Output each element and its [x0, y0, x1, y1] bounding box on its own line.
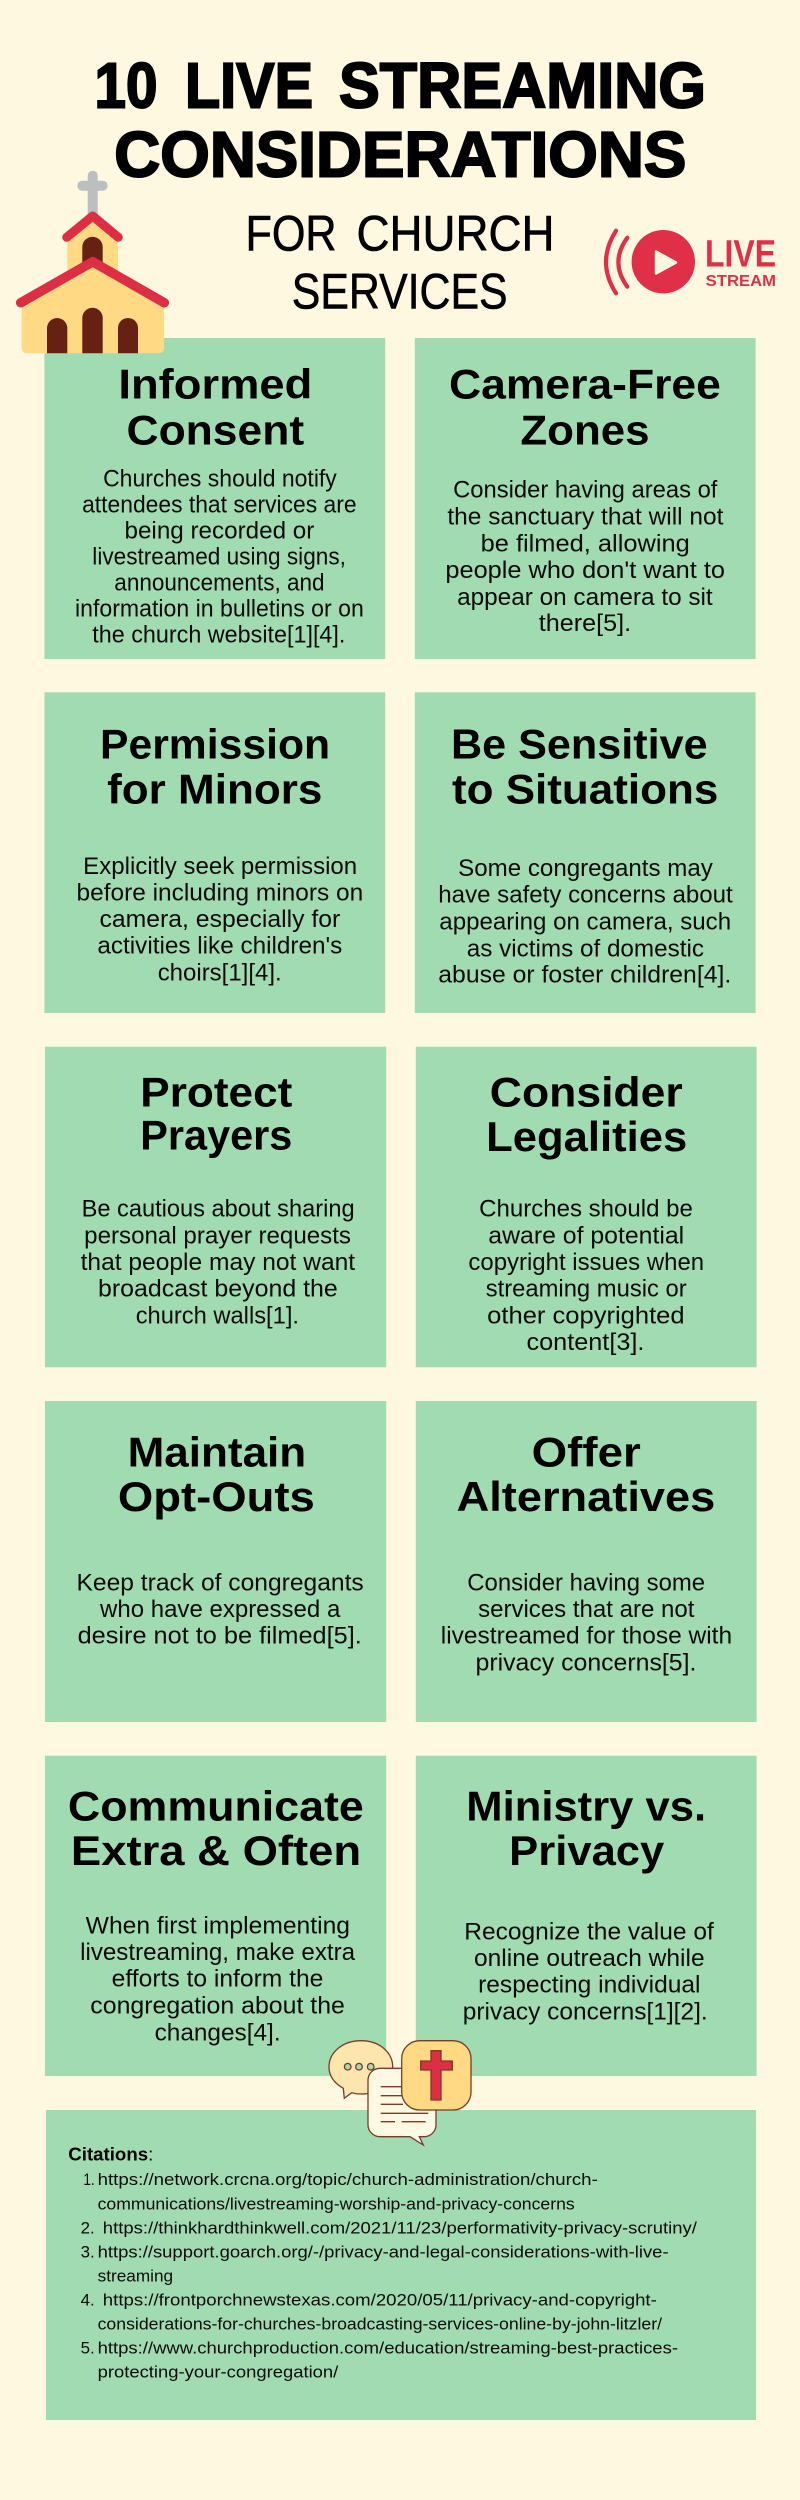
heading: informed consent: Informed: [118, 360, 312, 407]
heading: offer alternatives: [457, 1429, 715, 1520]
text: consider legalities body: content[3].: [526, 1329, 644, 1356]
heading: communicate extra and often: Communicate: [68, 1783, 364, 1830]
list: citation links: https://frontporchnewstexas.com/2020/05/11/privacy-and-copyright-: [103, 2290, 657, 2309]
heading: permission for minors: for Minors: [107, 765, 322, 812]
text: camera-free zones body: people who don't want to: [445, 557, 725, 584]
heading: consider legalities: Legalities: [486, 1113, 687, 1160]
text: informed consent body: the church website[1][4].: [92, 622, 345, 649]
text: informed consent body: [75, 466, 364, 649]
heading: be sensitive to situations: [451, 720, 718, 812]
text: ministry vs privacy body: respecting individual: [478, 1972, 700, 1999]
heading: offer alternatives: Alternatives: [457, 1473, 715, 1520]
text: maintain opt-outs body: desire not to be filmed[5].: [78, 1623, 362, 1650]
text: ministry vs privacy body: online outreach while: [474, 1945, 705, 1972]
heading: protect prayers: Protect: [140, 1069, 292, 1116]
text: camera-free zones body: appear on camera to sit: [457, 584, 713, 611]
heading: be sensitive to situations: to Situations: [452, 765, 718, 812]
text: informed consent body: being recorded or: [124, 518, 314, 545]
text: communicate body: efforts to inform the: [112, 1966, 323, 1993]
text: camera-free zones body: Consider having areas of: [453, 477, 718, 504]
text: camera-free zones body: the sanctuary that will not: [447, 504, 724, 531]
title: LIVE: [185, 49, 313, 121]
text: informed consent body: attendees that services are: [82, 492, 357, 519]
subtitle: CHURCH: [356, 206, 554, 262]
title: STREAMING: [339, 49, 706, 121]
list: citation links: https://thinkhardthinkwell.com/2021/11/23/performativity-privacy-scrutiny/: [103, 2218, 697, 2237]
list: citation links: 4.: [81, 2290, 95, 2309]
text: permission for minors body: choirs[1][4].: [158, 960, 282, 987]
text: permission for minors body: Explicitly seek permission: [83, 853, 357, 880]
text: offer alternatives body: privacy concerns[5].: [476, 1649, 696, 1676]
list: citation links: streaming: [98, 2266, 173, 2285]
text: protect prayers body: Be cautious about sharing: [82, 1196, 355, 1223]
text: communicate body: [80, 1912, 356, 2047]
panel: maintain opt-outs: [45, 1401, 386, 1722]
text: permission for minors body: before including minors on: [76, 880, 363, 907]
icon: speech bubbles with cross: [329, 2041, 471, 2145]
text: consider legalities body: streaming music or: [486, 1276, 687, 1303]
text: informed consent body: information in bulletins or on: [75, 596, 364, 623]
panel: camera-free zones: [415, 338, 756, 659]
heading: camera-free zones: [449, 360, 721, 453]
text: informed consent body: announcements, and: [114, 570, 324, 597]
heading: ministry vs privacy: [466, 1783, 706, 1874]
text: offer alternatives body: services that are not: [478, 1596, 695, 1623]
list: citation links: 3.: [81, 2242, 95, 2261]
text: maintain opt-outs body: Keep track of congregants: [76, 1569, 364, 1596]
text: be sensitive body: have safety concerns about: [438, 882, 733, 909]
list: citation links: protecting-your-congregation/: [98, 2362, 339, 2381]
heading: informed consent: Consent: [126, 406, 304, 453]
heading: consider legalities: [486, 1069, 687, 1160]
subtitle: SERVICES: [292, 263, 508, 319]
icon: live stream logo: STREAM: [706, 273, 776, 290]
text: camera-free zones body: [445, 477, 725, 637]
text: offer alternatives body: Consider having some: [467, 1569, 705, 1596]
text: informed consent body: Churches should notify: [103, 466, 337, 493]
heading: communicate extra and often: Extra & Often: [71, 1827, 361, 1874]
text: protect prayers body: that people may not want: [81, 1249, 355, 1276]
panel: consider legalities: [416, 1047, 757, 1367]
heading: ministry vs privacy: Privacy: [509, 1827, 665, 1874]
text: informed consent body: livestreamed using signs,: [92, 544, 346, 571]
heading: ministry vs privacy: Ministry vs.: [466, 1783, 706, 1830]
heading: camera-free zones: Camera-Free: [449, 360, 721, 407]
text: be sensitive body: [438, 855, 733, 989]
list: citation links: considerations-for-churches-broadcasting-services-online-by-john-litzler/: [98, 2314, 662, 2333]
heading: citations: Citations:: [68, 2145, 153, 2165]
text: be sensitive body: as victims of domestic: [467, 935, 704, 962]
heading: informed consent: [118, 360, 312, 453]
text: ministry vs privacy body: Recognize the value of: [464, 1918, 714, 1945]
subtitle: [246, 206, 554, 319]
text: permission for minors body: activities like children's: [97, 933, 342, 960]
text: offer alternatives body: livestreamed for those with: [441, 1623, 732, 1650]
heading: offer alternatives: Offer: [532, 1429, 641, 1476]
text: ministry vs privacy body: privacy concerns[1][2].: [463, 1998, 708, 2025]
text: offer alternatives body: [441, 1569, 732, 1676]
text: maintain opt-outs body: [76, 1569, 364, 1650]
text: camera-free zones body: be filmed, allowing: [481, 531, 690, 558]
list: citation links: 5.: [81, 2338, 95, 2357]
text: permission for minors body: camera, especially for: [100, 906, 340, 933]
list: citation links: communications/livestreaming-worship-and-privacy-concerns: [98, 2194, 575, 2213]
heading: protect prayers: Prayers: [140, 1111, 292, 1158]
panel: protect prayers: [45, 1047, 386, 1367]
text: protect prayers body: broadcast beyond the: [98, 1276, 338, 1303]
heading: protect prayers: [140, 1069, 292, 1158]
panel: permission for minors: [44, 692, 385, 1013]
icon: live stream logo: [606, 230, 776, 293]
heading: be sensitive to situations: Be Sensitive: [451, 720, 708, 767]
list: citation links: https://www.churchproduction.com/education/streaming-best-practices-: [98, 2338, 678, 2357]
text: protect prayers body: personal prayer requests: [84, 1222, 351, 1249]
heading: maintain opt-outs: [118, 1429, 315, 1520]
text: camera-free zones body: there[5].: [539, 610, 631, 637]
heading: consider legalities: Consider: [490, 1069, 683, 1116]
panel: communicate extra and often: [45, 1756, 386, 2076]
text: consider legalities body: [468, 1195, 704, 1356]
text: protect prayers body: [81, 1196, 355, 1329]
text: consider legalities body: copyright issues when: [468, 1249, 704, 1276]
text: consider legalities body: Churches should be: [479, 1195, 693, 1222]
heading: communicate extra and often: [68, 1783, 364, 1874]
heading: camera-free zones: Zones: [520, 406, 650, 453]
text: protect prayers body: church walls[1].: [136, 1302, 299, 1329]
heading: permission for minors: [100, 720, 330, 812]
text: be sensitive body: abuse or foster children[4].: [438, 962, 731, 989]
panel: ministry vs privacy: [416, 1756, 757, 2076]
subtitle: FOR: [246, 206, 336, 262]
title: 10: [94, 49, 158, 121]
heading: maintain opt-outs: Opt-Outs: [118, 1473, 315, 1520]
text: maintain opt-outs body: who have expressed a: [99, 1596, 341, 1623]
panel: offer alternatives: [416, 1401, 757, 1722]
list: citation links: 1.: [83, 2170, 95, 2189]
list: citation links: 2.: [81, 2218, 95, 2237]
text: be sensitive body: appearing on camera, such: [439, 909, 731, 936]
panel: informed consent: [44, 338, 385, 659]
text: permission for minors body: [76, 853, 363, 987]
panel: citations: [46, 2110, 756, 2420]
text: communicate body: changes[4].: [155, 2020, 281, 2047]
icon: live stream logo: LIVE: [705, 234, 776, 276]
text: communicate body: When first implementing: [86, 1912, 350, 1939]
heading: permission for minors: Permission: [100, 720, 330, 767]
title: CONSIDERATIONS: [114, 119, 686, 191]
heading: maintain opt-outs: Maintain: [128, 1429, 306, 1476]
text: communicate body: livestreaming, make extra: [80, 1939, 356, 1966]
list: citation links: https://support.goarch.org/-/privacy-and-legal-considerations-with-live-: [98, 2242, 669, 2261]
text: consider legalities body: other copyrighted: [487, 1302, 685, 1329]
panel: be sensitive to situations: [415, 692, 756, 1013]
text: consider legalities body: aware of potential: [488, 1222, 684, 1249]
list: citation links: [81, 2170, 697, 2381]
list: citation links: https://network.crcna.org/topic/church-administration/church-: [98, 2170, 598, 2189]
text: ministry vs privacy body: [463, 1918, 714, 2025]
title: [94, 49, 706, 191]
text: communicate body: congregation about the: [90, 1992, 345, 2019]
icon: church: [21, 171, 164, 353]
text: be sensitive body: Some congregants may: [458, 855, 713, 882]
